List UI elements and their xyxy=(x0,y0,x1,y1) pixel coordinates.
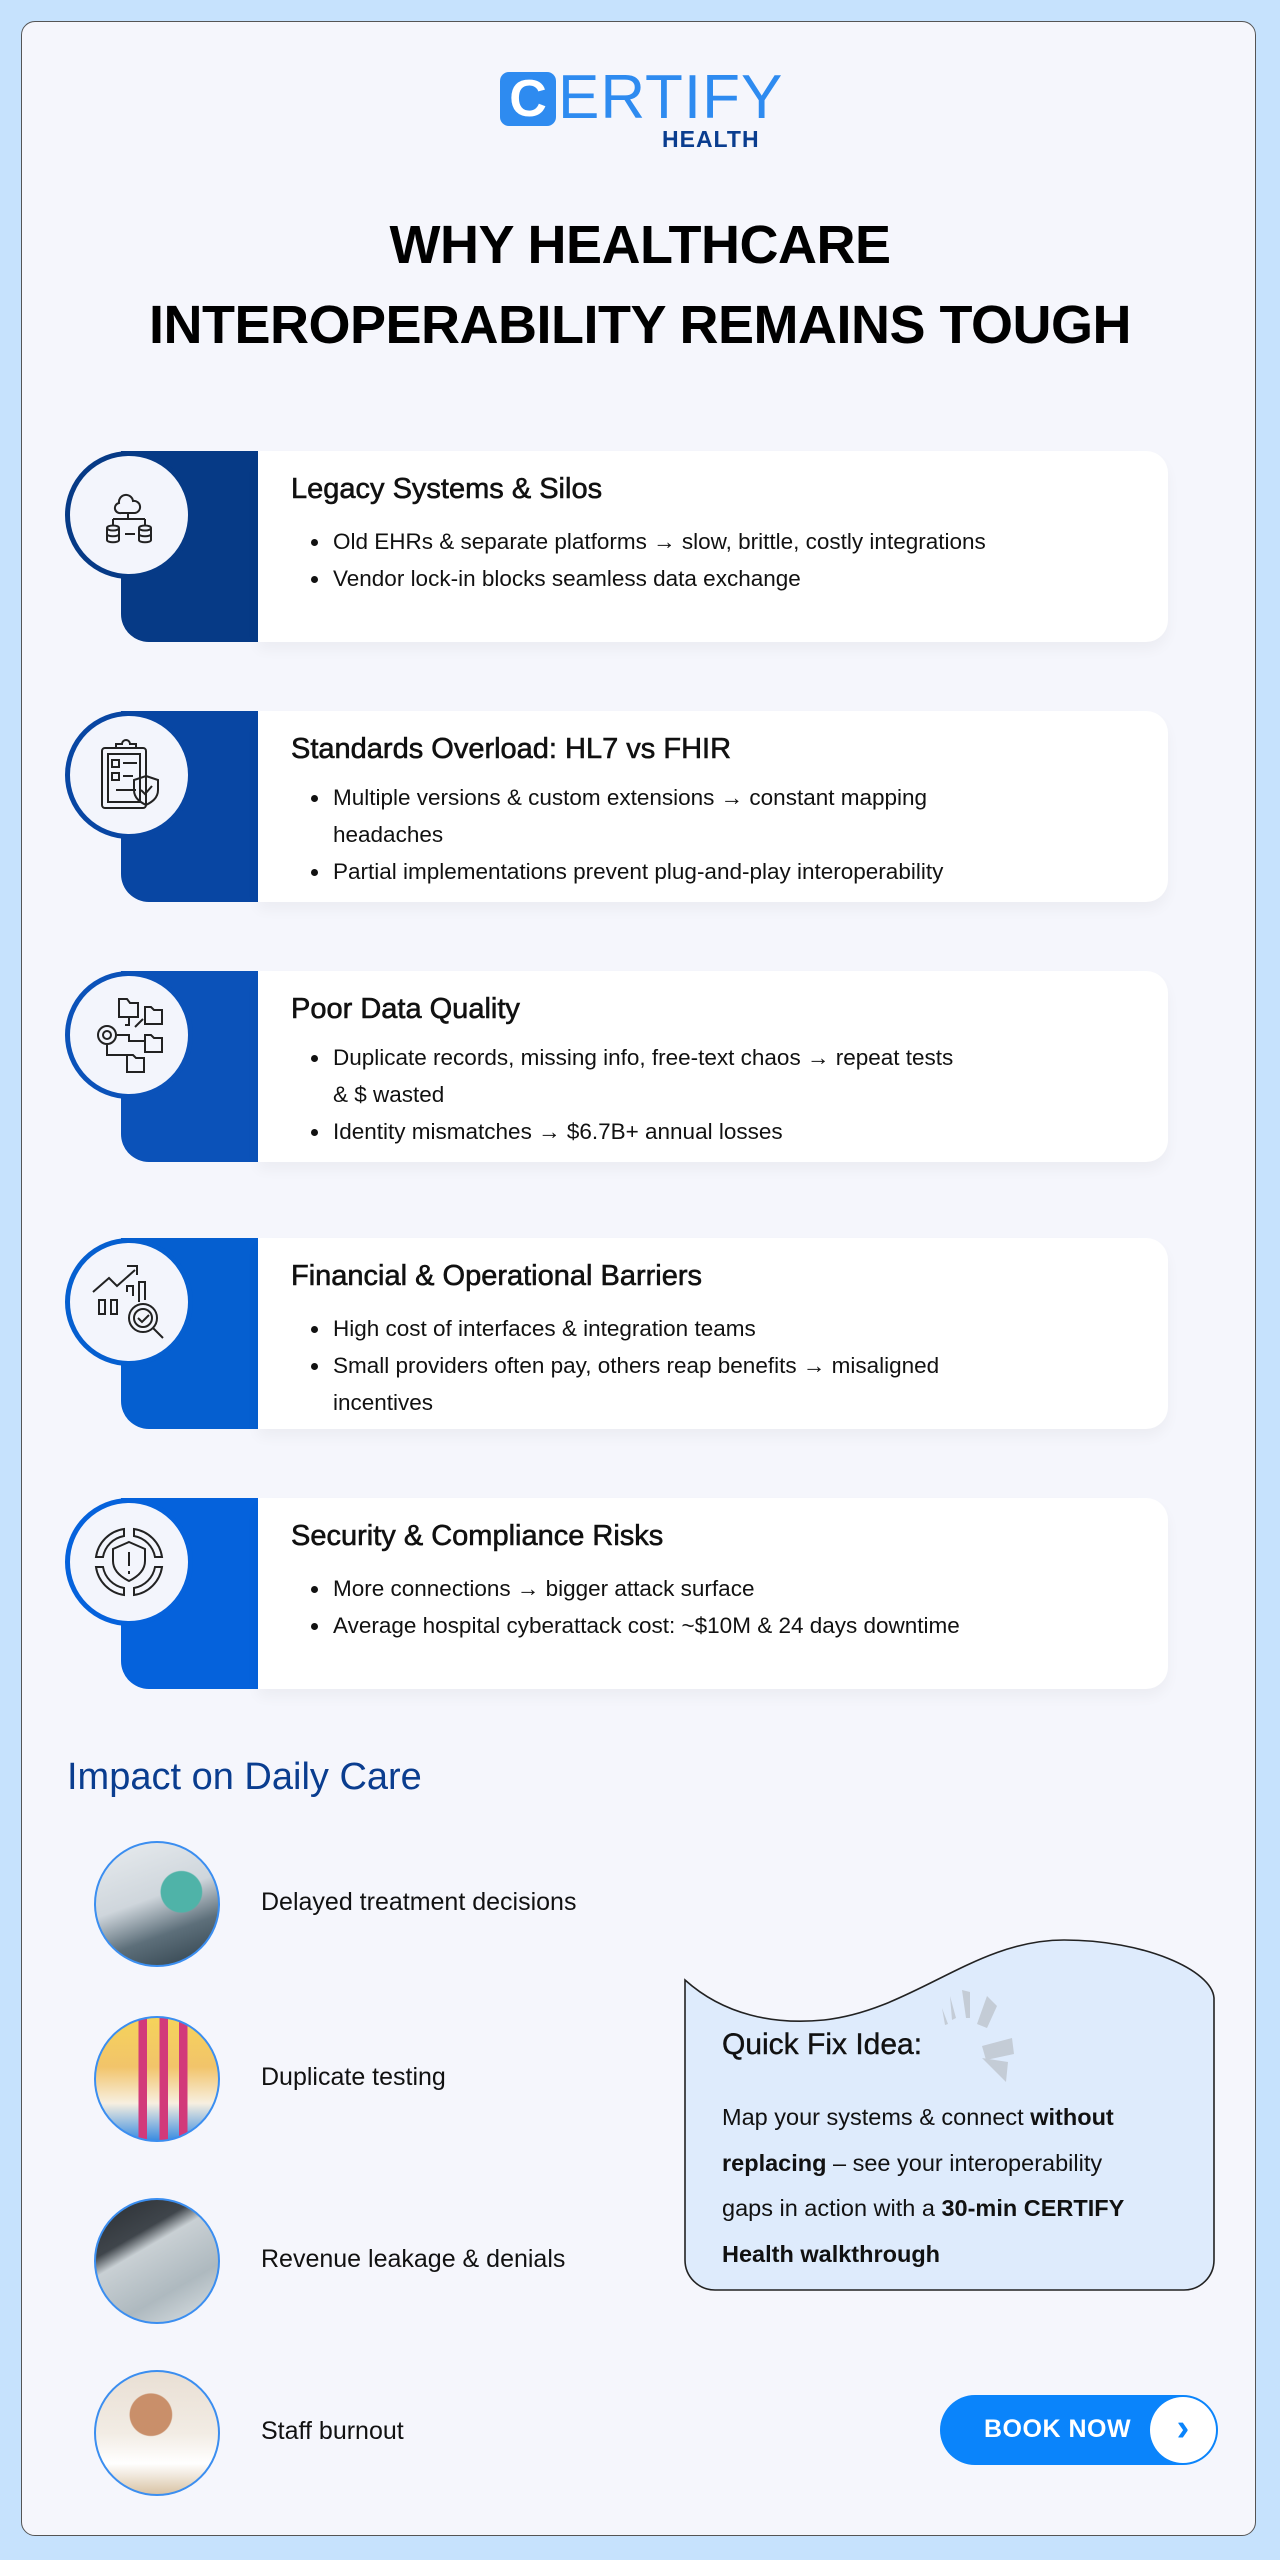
callout: quick fix idea: gaps in action with a 30-min CERTIFY xyxy=(722,2195,1124,2221)
impact item 2 xyxy=(94,2016,446,2142)
icon: arrow circle xyxy=(1150,2397,1216,2463)
icon: gear folders xyxy=(65,971,193,1099)
card 2: standards overload: Multiple versions & custom extensions → constant mapping xyxy=(333,785,927,810)
book now button: BOOK NOW xyxy=(984,2415,1131,2443)
impact item 2: Duplicate testing xyxy=(261,2063,446,2091)
impact item 1 xyxy=(94,1841,576,1967)
card 3: poor data quality xyxy=(65,971,1168,1162)
card 2: standards overload: Standards Overload: HL7 vs FHIR xyxy=(291,733,731,765)
card 3: poor data quality: Duplicate records, missing info, free-text chaos → repeat tests xyxy=(333,1045,953,1070)
card 4: financial barriers xyxy=(65,1238,1168,1429)
icon: burst xyxy=(942,1990,1014,2082)
card 4: financial barriers: incentives xyxy=(333,1390,433,1415)
logo: HEALTH xyxy=(662,126,760,152)
icon: clipboard shield xyxy=(65,711,193,839)
card 3: poor data quality: & $ wasted xyxy=(333,1082,444,1107)
impact item 3: Revenue leakage & denials xyxy=(261,2245,565,2273)
logo xyxy=(500,63,783,152)
logo mark C: C xyxy=(509,70,547,128)
impact item 4: Staff burnout xyxy=(261,2417,404,2445)
card 5: security risks: Security & Compliance Risks xyxy=(291,1520,663,1552)
card 2: standards overload xyxy=(65,711,1168,902)
icon: chart magnifier xyxy=(65,1238,193,1366)
card 3: poor data quality: Poor Data Quality xyxy=(291,993,520,1025)
card 5: security risks: More connections → bigger attack surface xyxy=(333,1576,754,1601)
callout: quick fix idea: Health walkthrough xyxy=(722,2240,940,2266)
impact heading: Impact on Daily Care xyxy=(67,1756,422,1798)
title xyxy=(149,215,1131,355)
callout: quick fix idea: Map your systems & connect without xyxy=(722,2104,1114,2130)
card 5: security risks: Average hospital cyberattack cost: ~$10M & 24 days downtime xyxy=(333,1613,960,1638)
card 4: financial barriers: Small providers often pay, others reap benefits → misaligned xyxy=(333,1353,939,1378)
impact item 4 xyxy=(94,2370,404,2496)
card 2: standards overload: headaches xyxy=(333,822,443,847)
card 3: poor data quality: Identity mismatches → $6.7B+ annual losses xyxy=(333,1119,783,1144)
callout: quick fix idea: replacing – see your interoperability xyxy=(722,2150,1102,2176)
card 4: financial barriers: Financial & Operational Barriers xyxy=(291,1260,702,1292)
icon: cloud databases xyxy=(65,451,193,579)
callout: quick fix idea: Quick Fix Idea: xyxy=(722,2028,922,2061)
heading: Legacy Systems & Silos xyxy=(291,473,602,505)
title: INTEROPERABILITY REMAINS TOUGH xyxy=(149,295,1131,355)
impact item 1: Delayed treatment decisions xyxy=(261,1888,576,1916)
logo: ERTIFY xyxy=(558,63,783,132)
logo mark C xyxy=(500,72,556,126)
title: WHY HEALTHCARE xyxy=(390,215,890,275)
card 1: legacy systems xyxy=(65,451,1168,642)
callout: quick fix idea xyxy=(684,1939,1215,2291)
icon: shield alert xyxy=(65,1498,193,1626)
icon: arrow circle: › xyxy=(1177,2407,1189,2449)
card 5: security risks xyxy=(65,1498,1168,1689)
card 4: financial barriers: High cost of interfaces & integration teams xyxy=(333,1316,756,1341)
bullets: Vendor lock-in blocks seamless data exchange xyxy=(333,566,801,591)
bullets xyxy=(311,529,986,591)
book now button xyxy=(940,2395,1218,2465)
impact item 3 xyxy=(94,2198,565,2324)
card 2: standards overload: Partial implementations prevent plug-and-play interoperability xyxy=(333,859,943,884)
bullets: Old EHRs & separate platforms → slow, brittle, costly integrations xyxy=(333,529,986,554)
